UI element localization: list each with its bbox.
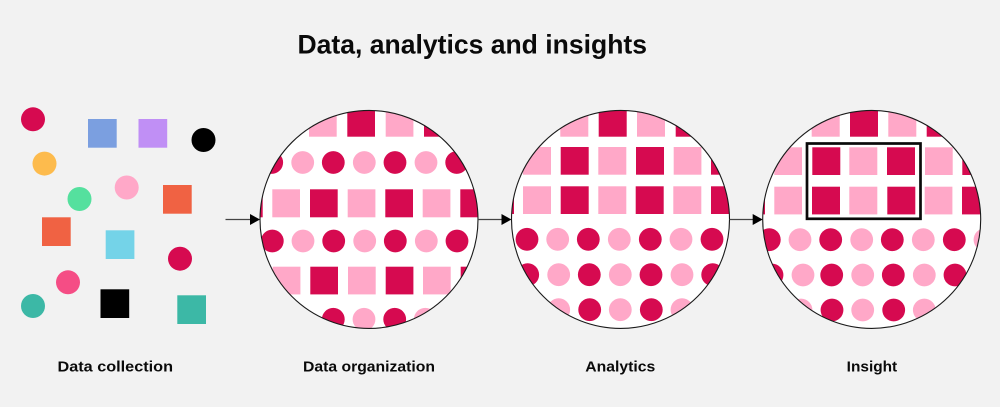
arrow: organization to analytics xyxy=(478,214,512,225)
panel: insight circle xyxy=(762,110,982,329)
arrow: collection to organization xyxy=(226,214,260,225)
label: insight: Insight xyxy=(847,358,897,375)
label: data collection: Data collection xyxy=(58,358,173,375)
panel: data collection scattered shapes xyxy=(21,107,216,324)
label: data organization: Data organization xyxy=(303,358,435,375)
title: Data, analytics and insights xyxy=(298,30,647,60)
highlight box xyxy=(807,144,920,219)
panel: data organization circle xyxy=(259,110,479,329)
panel: analytics circle xyxy=(510,110,730,329)
label: analytics: Analytics xyxy=(585,358,655,375)
arrow: analytics to insight xyxy=(730,214,763,225)
